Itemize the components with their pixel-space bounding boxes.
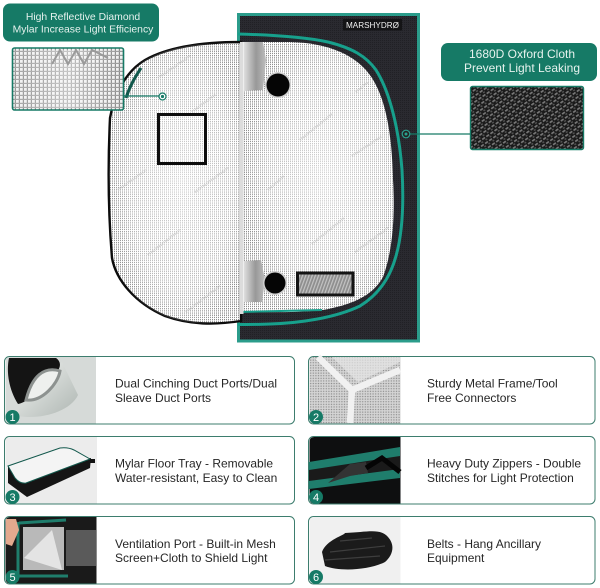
- tent watermarks: [268, 82, 388, 252]
- feature text: Sleave Duct Ports: [115, 391, 211, 405]
- callout heading badge: High Reflective Diamond: [26, 12, 140, 23]
- feature text: [115, 537, 276, 565]
- callout heading badge: [441, 43, 597, 81]
- mylar swatch: [12, 48, 124, 110]
- callout heading badge: Mylar Increase Light Efficiency: [13, 24, 154, 36]
- callout heading badge: [3, 4, 159, 42]
- feature text: Ventilation Port - Built-in Mesh: [115, 537, 276, 551]
- mesh vent: [298, 273, 353, 295]
- logo: MARS HYDRO: [343, 19, 402, 30]
- panel: feature 3 floor tray: [4, 436, 294, 504]
- panel: feature 4 zippers: [308, 436, 595, 504]
- number badge 1: [6, 410, 20, 424]
- feature text: [427, 456, 581, 485]
- feature text: Free Connectors: [427, 391, 516, 405]
- bottom duct port: [244, 260, 287, 302]
- door seam: [240, 42, 244, 314]
- logo: MARS HYDRO: MARSHYDRØ: [346, 21, 399, 30]
- teal zipper curve: [238, 34, 403, 324]
- panel: feature 5 ventilation port: [4, 516, 294, 584]
- number badge 3: [6, 490, 20, 504]
- feature text: Screen+Cloth to Shield Light: [115, 551, 268, 565]
- photo: zipper: [309, 437, 400, 504]
- door window frame: [158, 114, 206, 164]
- feature text: Equipment: [427, 551, 485, 565]
- number badge 3: 3: [9, 492, 16, 504]
- feature text: Belts - Hang Ancillary: [427, 537, 541, 551]
- photo: ventilation port: [6, 517, 96, 584]
- connector line and dot: [402, 130, 470, 138]
- feature text: [427, 537, 541, 565]
- right interior mylar wall: [243, 42, 394, 312]
- number badge 2: [309, 410, 323, 424]
- number badge 6: 6: [313, 572, 319, 584]
- panel: feature 2 metal frame: [308, 356, 595, 424]
- number badge 4: [309, 490, 323, 504]
- photo: belts: [310, 517, 400, 584]
- feature text: [115, 456, 277, 485]
- feature text: Stitches for Light Protection: [427, 471, 574, 485]
- number badge 2: 2: [313, 412, 319, 424]
- feature text: [427, 376, 558, 405]
- oxford cloth swatch: [470, 86, 584, 150]
- feature text: Mylar Floor Tray - Removable: [115, 456, 273, 470]
- tent back panel: [238, 14, 418, 341]
- photo: metal frame: [310, 357, 400, 424]
- connector line and dot: [124, 93, 166, 100]
- watermarks: [118, 56, 228, 312]
- feature text: Heavy Duty Zippers - Double: [427, 456, 581, 470]
- feature text: Water-resistant, Easy to Clean: [115, 471, 277, 485]
- number badge 4: 4: [313, 492, 319, 504]
- door strap: [126, 68, 141, 98]
- callout: oxford cloth: [402, 43, 597, 150]
- feature text: [115, 376, 277, 405]
- photo: duct port: [6, 357, 96, 424]
- lower teal edge: [238, 310, 322, 312]
- left door mylar panel: [109, 42, 241, 324]
- feature text: Sturdy Metal Frame/Tool: [427, 376, 558, 390]
- panel: feature 6 belts: [308, 516, 595, 584]
- number badge 5: [6, 570, 20, 584]
- panel: feature 1 duct ports: [4, 356, 294, 424]
- callout: mylar: [3, 4, 166, 110]
- feature text: Dual Cinching Duct Ports/Dual: [115, 376, 277, 390]
- photo: floor tray: [6, 437, 97, 504]
- number badge 6: [309, 570, 323, 584]
- number badge 5: 5: [9, 572, 16, 584]
- callout heading badge: 1680D Oxford Cloth: [469, 47, 575, 61]
- number badge 1: 1: [9, 412, 16, 424]
- top duct port: [244, 42, 291, 98]
- callout heading badge: Prevent Light Leaking: [464, 61, 580, 75]
